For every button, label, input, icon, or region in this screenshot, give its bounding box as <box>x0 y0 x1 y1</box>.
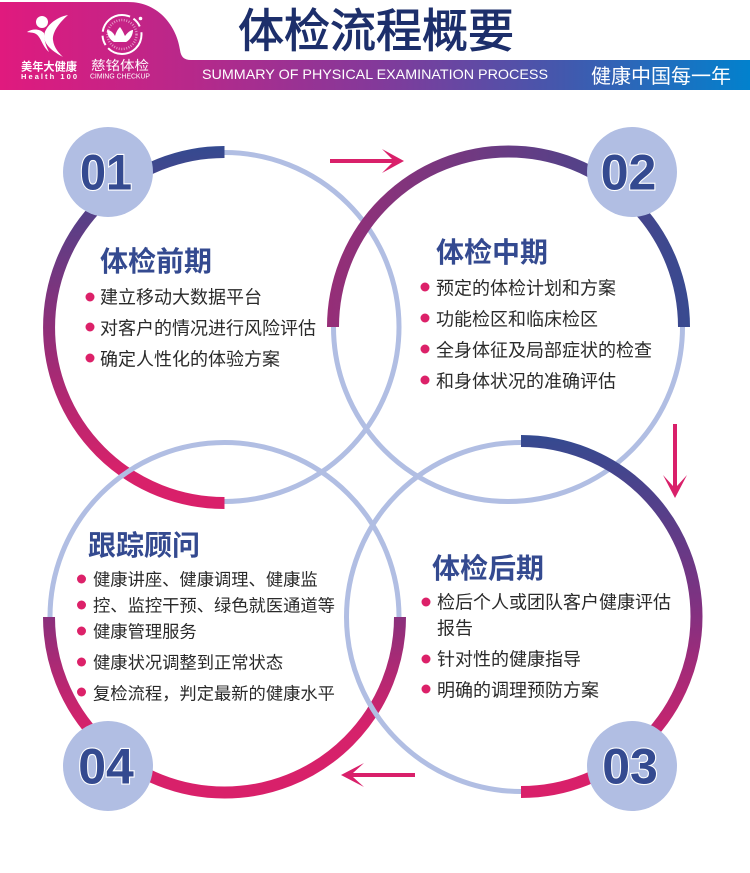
list: 针对性的健康指导 <box>437 650 581 670</box>
list: 健康讲座、健康调理、健康监 <box>93 570 318 590</box>
list <box>422 592 671 700</box>
logo: Ciming Checkup: 慈铭体检 <box>91 58 149 73</box>
badge 02 <box>587 127 677 217</box>
list: 健康状况调整到正常状态 <box>93 652 283 672</box>
logo: Ciming Checkup <box>90 15 150 80</box>
logo: Health 100: 美年大健康 <box>21 60 77 74</box>
list: 全身体征及局部症状的检查 <box>436 340 652 360</box>
heading: 体检中期 <box>436 237 548 268</box>
header banner <box>0 2 750 90</box>
ring 4 thick arc <box>49 617 400 793</box>
subtitle english: SUMMARY OF PHYSICAL EXAMINATION PROCESS <box>202 66 548 82</box>
ring 2 thin <box>334 152 682 502</box>
arrow: step 1 to 2 <box>330 149 404 173</box>
badge 01: 01 <box>80 144 132 200</box>
rings: overlapping process circles <box>49 152 696 793</box>
slogan: 健康中国每一年 <box>591 65 731 88</box>
ring 1 thick arc <box>49 152 224 503</box>
title: 体检流程概要 <box>238 5 514 57</box>
list: 预定的体检计划和方案 <box>436 278 616 298</box>
list: 对客户的情况进行风险评估 <box>100 318 316 338</box>
list: 健康管理服务 <box>93 622 197 642</box>
ring 4 thin <box>50 442 399 792</box>
list <box>77 570 335 704</box>
ring 2 thick arc <box>333 152 684 327</box>
ring 1 thin <box>50 152 399 502</box>
badge 04 <box>63 721 153 811</box>
panel: step 04 <box>63 530 335 811</box>
panel: step 01 <box>63 127 316 370</box>
heading: 体检后期 <box>432 553 544 584</box>
arrow: step 2 to 3 <box>663 424 687 498</box>
list: 明确的调理预防方案 <box>437 680 599 700</box>
list <box>86 288 316 370</box>
logo: Health 100 <box>21 15 77 81</box>
list: 复检流程，判定最新的健康水平 <box>93 684 335 704</box>
list: 和身体状况的准确评估 <box>436 372 616 392</box>
panel: step 02 <box>420 127 677 392</box>
list: 建立移动大数据平台 <box>100 288 262 308</box>
list: 功能检区和临床检区 <box>436 310 598 330</box>
banner background <box>0 2 750 90</box>
ring 3 thick arc <box>521 441 696 792</box>
logo: Health 100: Health 100 <box>21 72 77 81</box>
heading: 跟踪顾问 <box>88 530 200 561</box>
list <box>420 278 652 392</box>
badge 03 <box>587 721 677 811</box>
badge 03: 03 <box>602 738 658 794</box>
list: 控、监控干预、绿色就医通道等 <box>93 596 335 616</box>
arrow: step 3 to 4 <box>341 763 415 787</box>
ring 3 thin <box>346 442 696 792</box>
list: 检后个人或团队客户健康评估 <box>437 592 671 612</box>
list: 报告 <box>437 618 473 638</box>
badge 04: 04 <box>78 738 134 794</box>
badge 02: 02 <box>601 144 656 200</box>
heading: 体检前期 <box>100 246 212 277</box>
list: 确定人性化的体验方案 <box>100 350 280 370</box>
badge 01 <box>63 127 153 217</box>
logo: Ciming Checkup: CIMING CHECKUP <box>90 72 150 80</box>
panel: step 03 <box>422 553 677 811</box>
